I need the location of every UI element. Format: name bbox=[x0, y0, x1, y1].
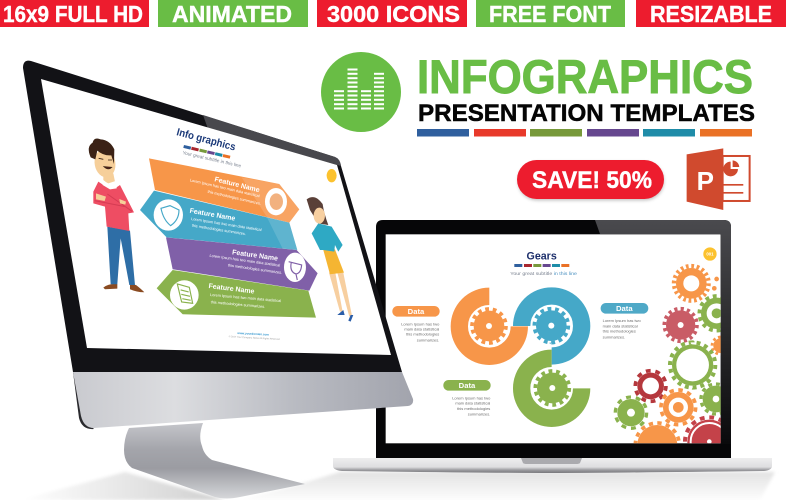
gear: large green ring bbox=[670, 342, 715, 388]
callout: orange data bbox=[392, 306, 440, 342]
gear: rose bbox=[664, 309, 697, 341]
banner: green feature: Feature Name bbox=[208, 283, 255, 296]
laptop bezel bbox=[376, 220, 731, 458]
banner: blue feature bbox=[140, 191, 297, 250]
gear: orange bottom bbox=[634, 421, 681, 444]
gear: orange ring bbox=[661, 390, 696, 425]
badge: free font: FREE FONT bbox=[489, 1, 611, 27]
callout: blue data: summarizes. bbox=[603, 334, 625, 339]
page badge bbox=[327, 169, 337, 182]
chin back edge bbox=[73, 372, 94, 429]
bezel glare bbox=[595, 220, 731, 444]
banner: green feature: this methodologies summarizes. bbox=[211, 300, 265, 309]
slide content bbox=[89, 126, 353, 341]
decorative gear cluster bbox=[614, 264, 721, 444]
slide subtitle: Your great subtitle in this line bbox=[182, 150, 242, 169]
monitor frame bbox=[23, 61, 402, 372]
callout: blue data: main data statistical bbox=[603, 323, 638, 328]
website footer: © 2017 Your Company Name All Rights Reserved bbox=[229, 335, 281, 341]
slide colour bars bbox=[183, 145, 230, 159]
icon: document bbox=[177, 284, 193, 303]
callout: green data bbox=[443, 380, 491, 417]
gear diagram: blue ring bbox=[522, 296, 582, 356]
ground shadow right bbox=[240, 472, 775, 500]
ground shadow left bbox=[20, 472, 225, 500]
page badge: 001 bbox=[706, 252, 714, 257]
badge: animated: ANIMATED bbox=[172, 1, 292, 27]
icon: powerpoint: P bbox=[697, 166, 714, 196]
gear: green right bbox=[698, 294, 721, 332]
laptop screen bbox=[386, 234, 721, 444]
callout: blue data: this methodologies bbox=[603, 329, 636, 334]
badge: resizable: RESIZABLE bbox=[650, 1, 772, 27]
slide title: info graphics: Info graphics bbox=[175, 126, 237, 154]
face bbox=[314, 208, 325, 224]
gear: red bottom bbox=[683, 415, 721, 444]
banner: green feature bbox=[157, 270, 316, 318]
banner: purple feature: Feature Name bbox=[232, 249, 278, 263]
save badge: SAVE! 50% bbox=[532, 167, 652, 194]
legs bbox=[329, 273, 352, 317]
colour bar strip bbox=[417, 129, 752, 136]
website footer bbox=[229, 331, 281, 341]
banner: blue feature: this methodologies summarizes. bbox=[191, 224, 246, 236]
callout: blue data: Lorem Ipsum has two bbox=[603, 318, 642, 323]
subtitle: presentation templates: PRESENTATION TEMPLATES bbox=[418, 100, 755, 127]
badge: 3000 icons: 3000 ICONS bbox=[327, 1, 460, 27]
callout: green data: Lorem Ipsum has two bbox=[452, 395, 491, 400]
callout: orange data: Lorem Ipsum has two bbox=[401, 321, 440, 326]
callout: green data: main data statistical bbox=[455, 401, 490, 406]
gear: dark red ring bbox=[635, 371, 666, 401]
base notch bbox=[521, 458, 582, 464]
gear diagram: green ring bbox=[522, 358, 582, 418]
jeans bbox=[107, 227, 135, 285]
crossed arm lines bbox=[95, 194, 132, 211]
gear: blue center bbox=[534, 309, 568, 343]
gear: green lower bbox=[615, 397, 647, 428]
shoes bbox=[103, 284, 144, 292]
sweater bbox=[93, 182, 134, 231]
hands bbox=[96, 193, 126, 205]
banner: blue feature: Feature Name bbox=[189, 208, 236, 223]
banner: orange feature: Feature Name bbox=[214, 176, 260, 194]
jacket bbox=[312, 223, 343, 252]
banner glare bbox=[242, 177, 299, 250]
page badge bbox=[703, 247, 717, 261]
banner: purple feature: Lorem Ipsum has two main data statistical bbox=[209, 254, 281, 268]
hair bbox=[307, 197, 328, 225]
icon: trophy bbox=[289, 262, 302, 280]
monitor chin bbox=[73, 372, 413, 428]
save badge bbox=[517, 160, 664, 200]
title: infographics: INFOGRAPHICS bbox=[417, 50, 753, 103]
callout: orange data: main data statistical bbox=[404, 326, 439, 331]
eyes and smile bbox=[99, 158, 112, 169]
slide subtitle: Your great subtitle in this line bbox=[510, 271, 577, 277]
gear: orange top bbox=[674, 266, 709, 301]
banner: blue feature: Lorem Ipsum has two main data statistical bbox=[191, 217, 262, 232]
gear: orange edge bbox=[710, 336, 721, 356]
banner: orange feature: Lorem Ipsum has two main data statistical bbox=[190, 178, 260, 198]
collar bbox=[102, 180, 117, 189]
logo icon: equalizer in green circle bbox=[321, 52, 401, 132]
monitor screen bbox=[41, 79, 391, 355]
gear: orange center bbox=[472, 309, 506, 343]
gear: green center bbox=[535, 371, 569, 405]
callout: orange data: Data bbox=[408, 307, 425, 316]
icon: powerpoint bbox=[687, 148, 750, 210]
laptop bbox=[333, 220, 772, 473]
character: man bbox=[89, 139, 144, 292]
badge: 16x9 full hd: 16x9 FULL HD bbox=[3, 1, 143, 27]
banner: purple feature: this methodologies summarizes. bbox=[228, 263, 282, 275]
icon: globe bbox=[270, 193, 283, 210]
callout: green data: Data bbox=[459, 381, 476, 390]
shoes bbox=[337, 310, 353, 322]
callout: green data: this methodologies bbox=[457, 406, 490, 411]
skirt bbox=[323, 249, 344, 274]
callout: orange data: this methodologies bbox=[406, 332, 439, 337]
desktop monitor bbox=[23, 61, 413, 499]
slide title: gears: Gears bbox=[527, 250, 557, 262]
callout: green data: summarizes. bbox=[468, 412, 490, 417]
laptop base bbox=[333, 458, 772, 473]
callout: orange data: summarizes. bbox=[417, 337, 439, 342]
banner: orange feature: this methodologies summarizes. bbox=[207, 190, 261, 206]
slide colour bars bbox=[514, 264, 569, 267]
neck bbox=[103, 172, 115, 184]
callout: blue data: Data bbox=[616, 304, 633, 313]
banner: green feature: Lorem Ipsum has two main data statistical bbox=[210, 293, 281, 303]
face bbox=[92, 148, 118, 179]
icon: shield bbox=[161, 206, 179, 226]
gear: green edge bbox=[699, 382, 721, 416]
header badges bbox=[0, 0, 786, 27]
banner: purple feature bbox=[166, 237, 318, 291]
gear diagram: orange ring bbox=[459, 296, 519, 356]
character: woman bbox=[307, 197, 353, 322]
website footer: www.yourdomain.com bbox=[236, 331, 269, 337]
banner: orange feature bbox=[149, 158, 299, 223]
callout: blue data bbox=[601, 303, 648, 339]
frame glare bbox=[203, 115, 341, 166]
hair bbox=[89, 139, 114, 164]
monitor stand bbox=[124, 423, 305, 498]
